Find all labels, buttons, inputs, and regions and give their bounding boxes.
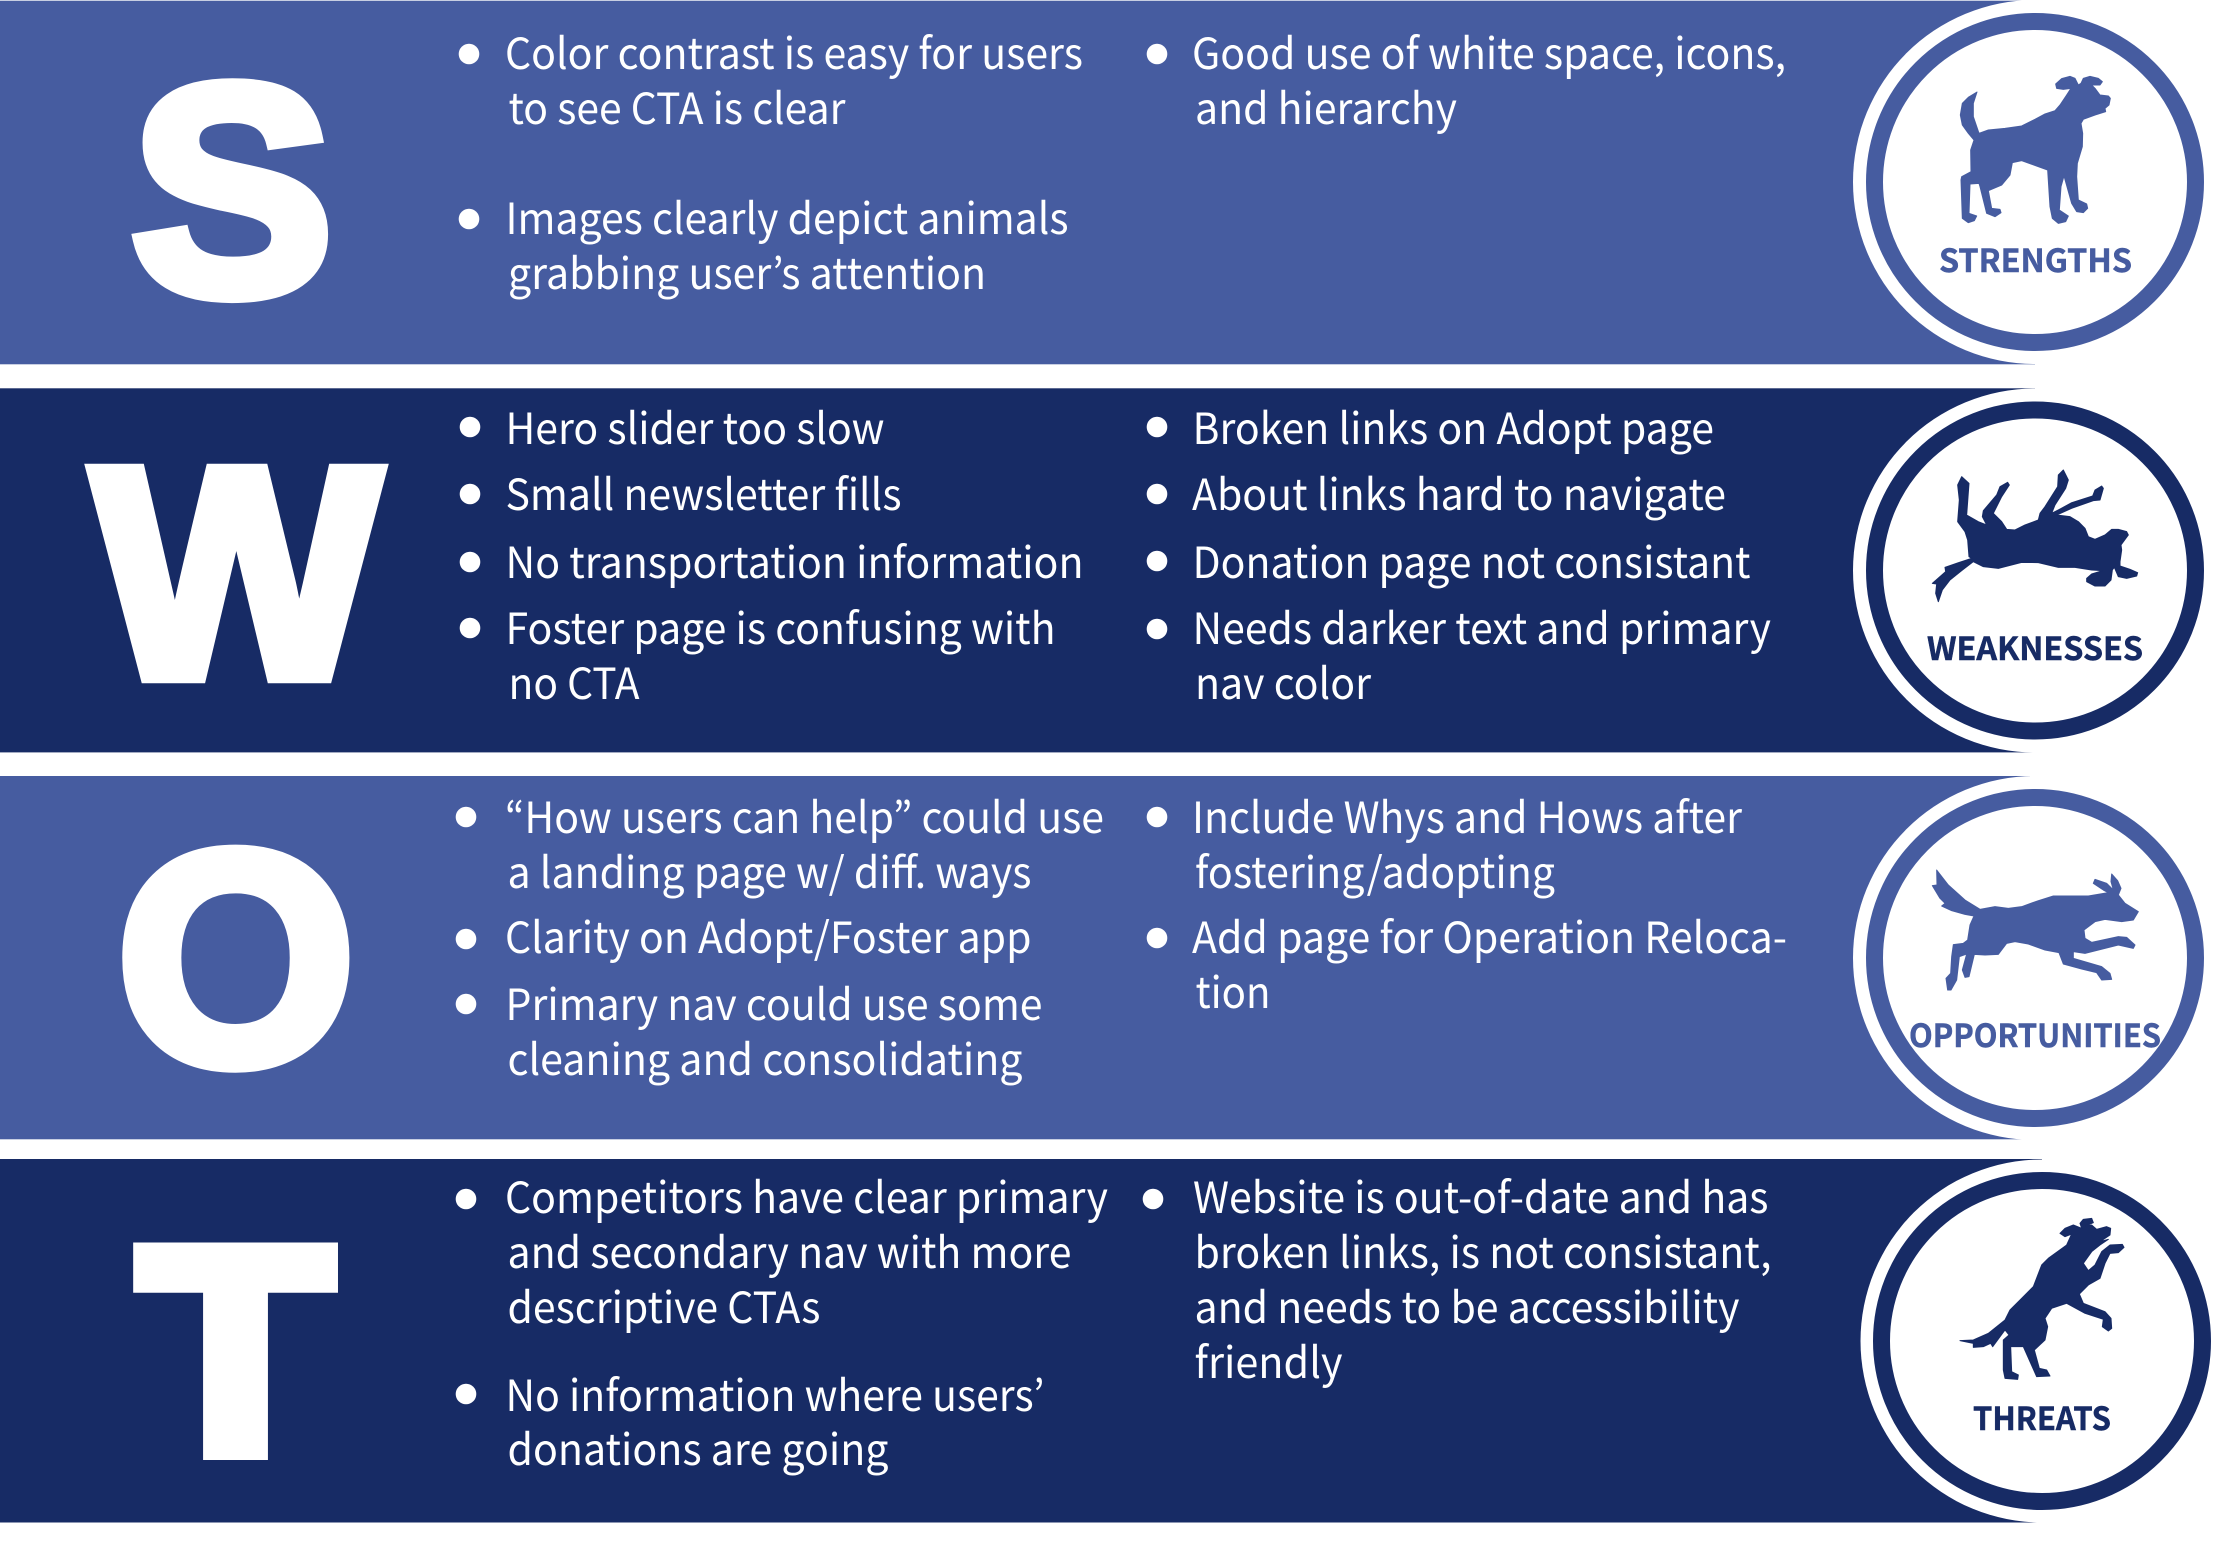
panel: weaknesses: [0, 388, 2217, 752]
weaknesses bullet list, column 2: Needs darker text and primary: [1192, 595, 1771, 657]
threats bullet list, column 2: and needs to be accessibility: [1194, 1274, 1740, 1336]
strengths bullet list, column 1: Images clearly depict animals: [506, 185, 1068, 247]
threats bullet list, column 2: Website is out-of-date and has: [1193, 1164, 1768, 1226]
opportunities bullet list, column 1: Primary nav could use some: [506, 971, 1042, 1033]
opportunities bullet list, column 2: fostering/adopting: [1195, 839, 1555, 901]
badge ring: threats: [1882, 1180, 2202, 1502]
strengths bullet list, column 1: to see CTA is clear: [508, 75, 846, 137]
opportunities bullet list, column 1: “How users can help” could use: [505, 784, 1104, 846]
opportunities bullet list, column 1: Clarity on Adopt/Foster app: [505, 904, 1032, 966]
label: strengths: STRENGTHS: [1939, 236, 2132, 282]
label: weaknesses: WEAKNESSES: [1927, 624, 2143, 670]
badge ring: strengths: [1874, 22, 2196, 342]
weaknesses bullet list, column 2: [1147, 395, 1771, 712]
letter W: W: [93, 406, 382, 739]
letter O: O: [117, 790, 355, 1127]
threats bullet list, column 1: [456, 1164, 1108, 1478]
panel: opportunities: [0, 776, 2217, 1140]
weaknesses bullet list, column 2: About links hard to navigate: [1192, 461, 1726, 523]
icon: standing dog: [1960, 76, 2110, 223]
opportunities bullet list, column 1: a landing page w/ diff. ways: [508, 839, 1032, 901]
threats bullet list, column 1: descriptive CTAs: [508, 1274, 820, 1336]
strengths bullet list, column 1: grabbing user’s attention: [508, 240, 986, 302]
panel: threats: [0, 1159, 2224, 1522]
weaknesses bullet list, column 2: Broken links on Adopt page: [1192, 395, 1714, 457]
weaknesses bullet list, column 1: Foster page is confusing with: [506, 595, 1056, 657]
weaknesses bullet list, column 1: no CTA: [508, 650, 640, 712]
icon: rearing dog: [1960, 1218, 2124, 1379]
badge ring: weaknesses: [1874, 410, 2196, 731]
weaknesses bullet list, column 1: [460, 395, 1084, 712]
strengths bullet list, column 1: Color contrast is easy for users: [505, 20, 1083, 82]
badge ring: opportunities: [1874, 798, 2196, 1118]
label: threats: THREATS: [1973, 1394, 2111, 1440]
opportunities bullet list, column 2: Include Whys and Hows after: [1192, 784, 1742, 846]
opportunities bullet list, column 2: Add page for Operation Reloca-: [1192, 904, 1787, 966]
threats bullet list, column 2: broken links, is not consistant,: [1194, 1219, 1772, 1281]
opportunities bullet list, column 2: tion: [1196, 959, 1270, 1021]
threats bullet list, column 2: [1143, 1164, 1772, 1391]
strengths bullet list, column 1: [459, 20, 1083, 302]
opportunities bullet list, column 1: [456, 784, 1104, 1088]
strengths bullet list, column 2: [1147, 20, 1786, 137]
threats bullet list, column 1: and secondary nav with more: [508, 1219, 1072, 1281]
threats bullet list, column 2: friendly: [1194, 1329, 1342, 1391]
threats bullet list, column 1: Competitors have clear primary: [505, 1164, 1108, 1226]
weaknesses bullet list, column 1: No transportation information: [506, 529, 1084, 591]
strengths bullet list, column 2: Good use of white space, icons,: [1192, 20, 1786, 82]
opportunities bullet list, column 1: cleaning and consolidating: [508, 1026, 1022, 1088]
icon: leaping dog: [1932, 870, 2138, 990]
label: opportunities: OPPORTUNITIES: [1909, 1011, 2161, 1057]
panel: strengths: [0, 0, 2217, 364]
weaknesses bullet list, column 1: Small newsletter fills: [506, 461, 902, 523]
threats bullet list, column 1: No information where users’: [506, 1362, 1044, 1424]
weaknesses bullet list, column 1: Hero slider too slow: [506, 395, 884, 457]
weaknesses bullet list, column 2: nav color: [1195, 650, 1371, 712]
opportunities bullet list, column 2: [1147, 784, 1787, 1021]
icon: dog rolling on back: [1932, 470, 2138, 602]
weaknesses bullet list, column 2: Donation page not consistant: [1192, 529, 1750, 591]
strengths bullet list, column 2: and hierarchy: [1195, 75, 1457, 137]
letter T: T: [139, 1189, 332, 1513]
letter S: S: [131, 25, 333, 357]
threats bullet list, column 1: donations are going: [508, 1416, 888, 1478]
